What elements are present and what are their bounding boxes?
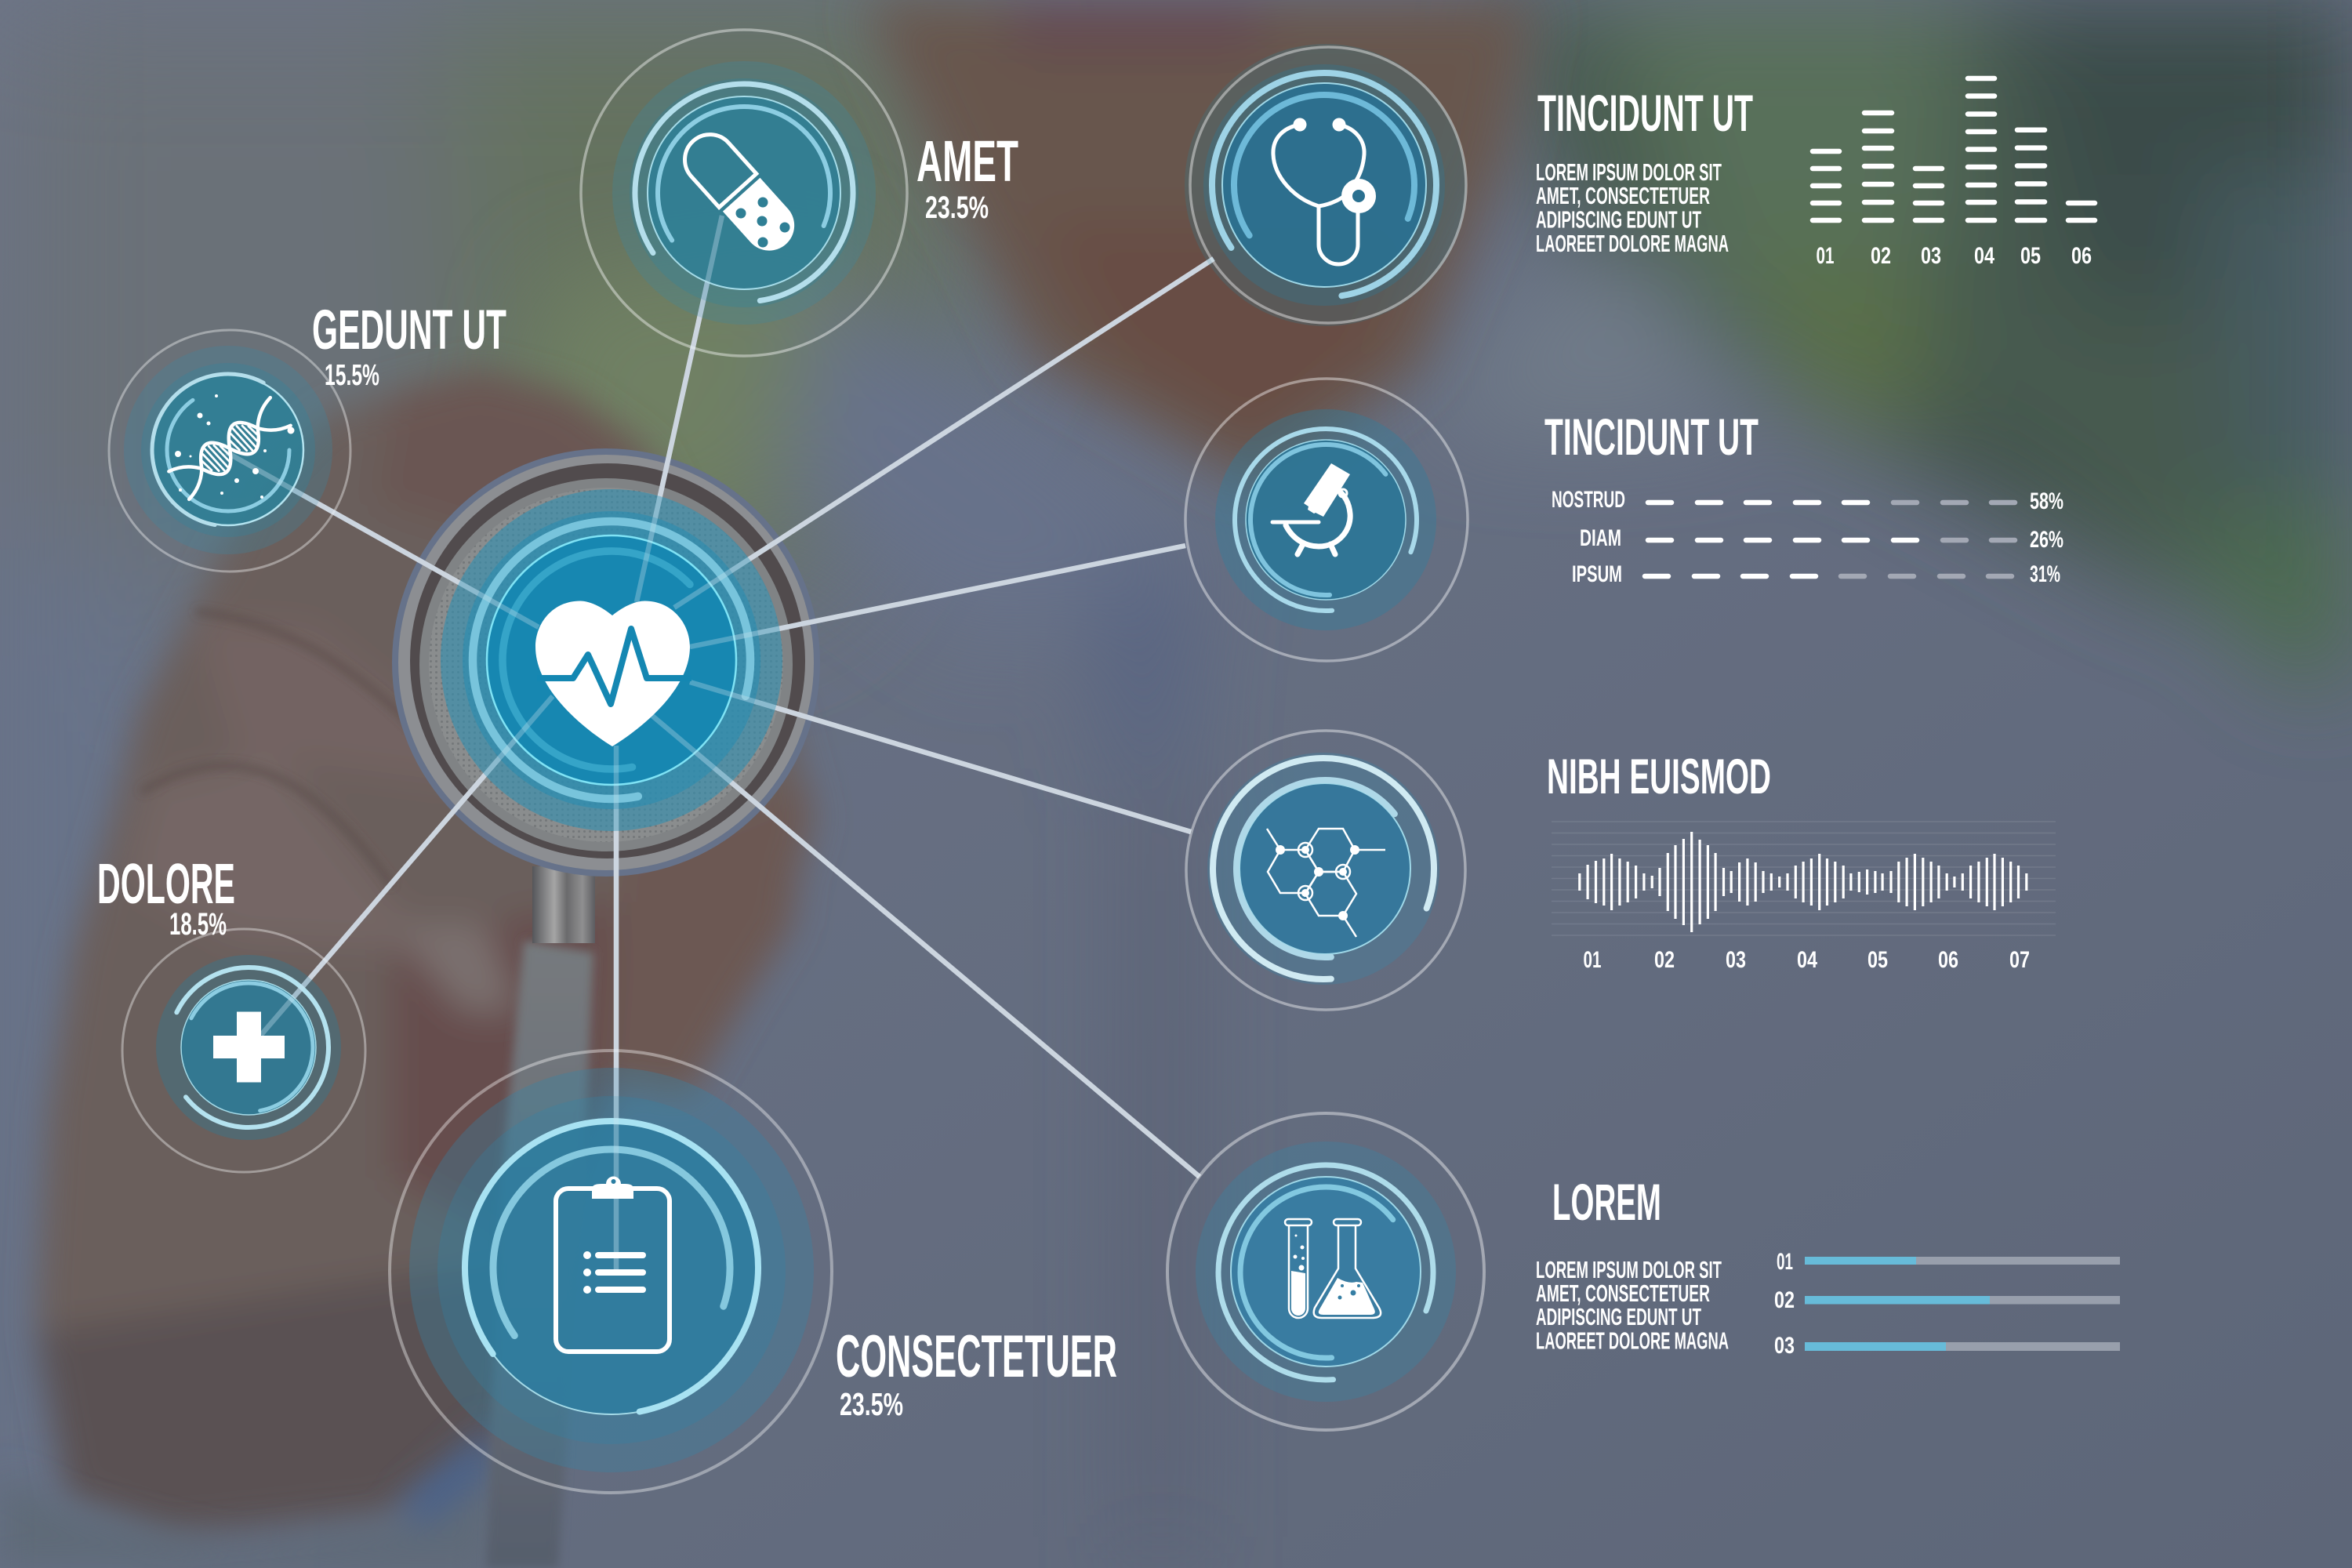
bar chart: stacked dashes: 06: [2071, 243, 2092, 269]
label: Gedunt ut: [312, 299, 506, 392]
icon: clipboard: [556, 1176, 670, 1352]
dash progress rows: 31%: [2030, 561, 2060, 587]
icon: microscope: [1272, 463, 1350, 554]
label: Dolore: 18.5%: [169, 907, 227, 942]
horizontal progress bars: 03: [1774, 1333, 1795, 1359]
horizontal progress bars: 01: [1777, 1249, 1793, 1275]
node: lab flask: [1167, 1113, 1484, 1430]
stethoscope head: [392, 448, 820, 877]
text block: lorem top: [1536, 158, 1729, 257]
icon: DNA helix: [169, 394, 295, 499]
text block: lorem bottom: LAOREET DOLORE MAGNA: [1536, 1327, 1729, 1355]
node: capsule: [581, 30, 907, 356]
label: Amet: [916, 129, 1018, 225]
node: molecule: [1186, 731, 1465, 1010]
dash progress rows: IPSUM: [1572, 561, 1622, 587]
label: Dolore: [97, 853, 235, 942]
bar chart: stacked dashes: 04: [1974, 243, 1994, 269]
text block: lorem top: LOREM IPSUM DOLOR SIT: [1536, 158, 1722, 186]
node: stethoscope: [1168, 29, 1480, 341]
stethoscope tube: [486, 941, 593, 1568]
label: Consectetuer: CONSECTETUER: [836, 1323, 1117, 1390]
hub: heart: [441, 489, 782, 831]
node: microscope: [1185, 379, 1468, 661]
bar chart: stacked dashes: 02: [1871, 243, 1891, 269]
waveform chart: 01: [1584, 947, 1601, 973]
dash progress rows: 26%: [2030, 527, 2063, 553]
icon: test tube and flask: [1285, 1219, 1381, 1318]
waveform chart: 02: [1654, 947, 1675, 973]
text block: lorem bottom: LOREM IPSUM DOLOR SIT: [1536, 1256, 1722, 1283]
heading: Lorem: LOREM: [1552, 1173, 1661, 1231]
heading: Tincidunt ut: TINCIDUNT UT: [1537, 84, 1753, 142]
horizontal progress bars: [1774, 1249, 2120, 1359]
icon: molecule hexagons: [1267, 829, 1385, 937]
waveform chart: 04: [1797, 947, 1817, 973]
text block: lorem top: AMET, CONSECTETUER: [1536, 182, 1710, 209]
node: medical cross: [122, 929, 365, 1172]
connector lines seen through the discs: [227, 216, 1214, 1269]
horizontal progress bars: 02: [1774, 1287, 1795, 1313]
bar chart: stacked dashes: [1813, 78, 2095, 269]
sleeve cuff: [0, 1419, 502, 1568]
dash progress rows: [1552, 487, 2063, 587]
text block: lorem top: ADIPISCING EDUNT UT: [1536, 205, 1701, 234]
label: Amet: 23.5%: [925, 191, 989, 225]
text block: lorem top: LAOREET DOLORE MAGNA: [1536, 230, 1729, 257]
text block: lorem bottom: [1536, 1256, 1729, 1355]
dash progress rows: DIAM: [1580, 525, 1621, 551]
text block: lorem bottom: AMET, CONSECTETUER: [1536, 1279, 1710, 1307]
dash progress rows: NOSTRUD: [1552, 487, 1625, 513]
icon: pill: [674, 124, 804, 261]
label: Consectetuer: [836, 1323, 1117, 1422]
waveform chart: 06: [1938, 947, 1958, 973]
waveform chart: 03: [1726, 947, 1746, 973]
label: Gedunt ut: GEDUNT UT: [312, 299, 506, 361]
bar chart: stacked dashes: 03: [1921, 243, 1941, 269]
label: Gedunt ut: 15.5%: [325, 359, 379, 392]
label: Consectetuer: 23.5%: [840, 1386, 903, 1422]
heading: Tincidunt ut second: TINCIDUNT UT: [1544, 408, 1759, 466]
node: clipboard: [390, 1051, 832, 1493]
heading: Nibh euismod: NIBH EUISMOD: [1547, 750, 1771, 804]
waveform chart: 05: [1867, 947, 1888, 973]
label: Dolore: DOLORE: [97, 853, 235, 916]
hand: [36, 369, 815, 1537]
text block: lorem bottom: ADIPISCING EDUNT UT: [1536, 1303, 1701, 1330]
icon: cross: [213, 1011, 285, 1082]
metal tube joint: [532, 866, 595, 943]
bar chart: stacked dashes: 05: [2020, 243, 2041, 269]
waveform chart: [1552, 822, 2056, 973]
dash progress rows: 58%: [2030, 488, 2063, 514]
node: DNA: [109, 330, 350, 572]
connector lines: [227, 216, 1214, 1269]
icon: heart with pulse: [535, 601, 691, 746]
icon: stethoscope: [1273, 118, 1370, 264]
waveform chart: 07: [2009, 947, 2030, 973]
label: Amet: AMET: [916, 129, 1018, 194]
bar chart: stacked dashes: 01: [1816, 243, 1835, 269]
